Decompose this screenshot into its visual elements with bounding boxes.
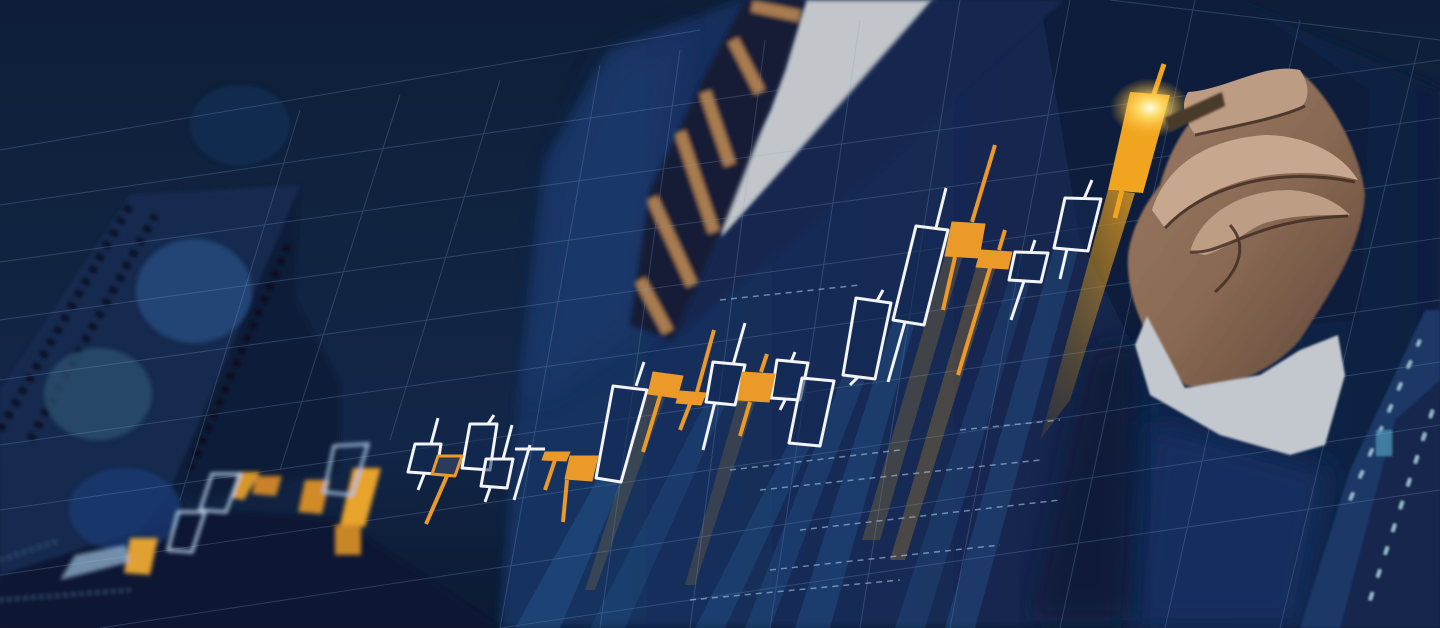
candlestick: large glowing orange candle at the pen tip [1108,64,1190,218]
bokeh circles [44,85,290,552]
shirt [716,0,935,238]
jacket lapel [660,0,1065,350]
suit jacket [500,0,1440,628]
candlesticks: white [408,180,1101,502]
blurred city buildings on the left [0,185,500,628]
data speckles [690,285,1060,600]
pen [1165,92,1225,132]
middle finger [1152,135,1358,228]
index finger [1184,69,1308,135]
hand [1128,69,1365,388]
candlesticks: orange [426,145,1012,524]
translucent chart columns under the candles [515,190,1135,628]
shirt cuff [1135,316,1345,455]
tie [630,0,805,340]
right side city buildings [1300,310,1440,628]
ring finger [1190,190,1350,255]
candlesticks: left blurred cluster [60,444,381,580]
